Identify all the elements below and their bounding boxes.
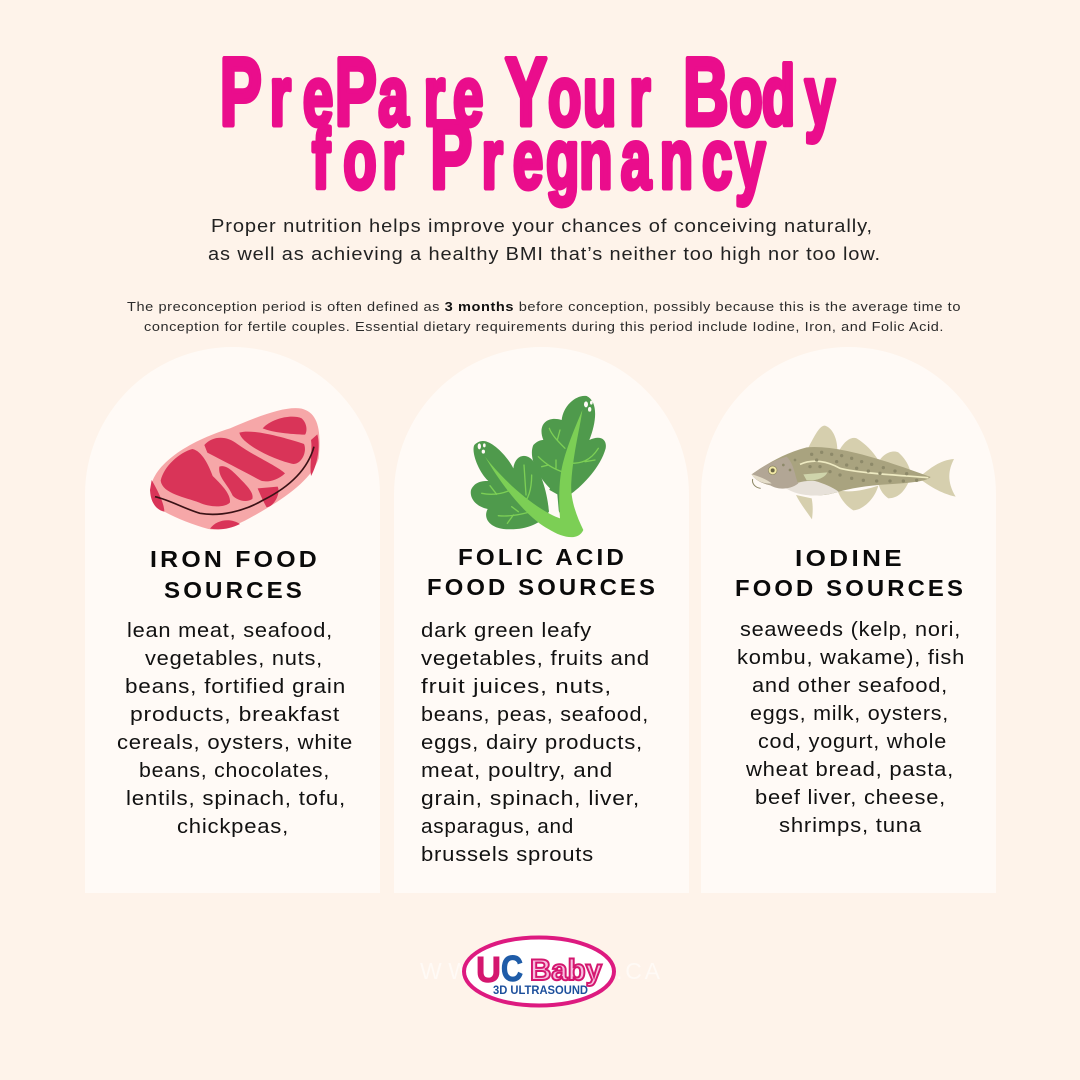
iron food list: vegetables, nuts, <box>145 648 323 670</box>
panel: iodine food sources <box>701 347 996 893</box>
iodine food list: shrimps, tuna <box>779 815 922 837</box>
iron food list <box>117 620 353 838</box>
iron food list: beans, chocolates, <box>139 760 330 782</box>
folic acid heading <box>427 544 658 600</box>
iodine card background <box>701 347 996 893</box>
panel: iron food sources <box>85 347 380 893</box>
iodine food list: kombu, wakame), fish <box>737 647 965 669</box>
folic acid food list: asparagus, and <box>421 816 574 838</box>
intro text: as well as achieving a healthy BMI that’s neither too high nor too low. <box>208 244 881 264</box>
iodine heading <box>735 545 966 601</box>
intro text <box>208 216 881 264</box>
iron heading: SOURCES <box>164 577 305 603</box>
folic acid food list: dark green leafy <box>421 620 592 642</box>
logo ellipse <box>464 938 614 1006</box>
icon: leafy greens <box>471 396 606 537</box>
title: PrePare Your Body <box>220 38 836 146</box>
iodine food list: seaweeds (kelp, nori, <box>740 619 961 641</box>
iodine food list: eggs, milk, oysters, <box>750 703 949 725</box>
logo wordmark: U <box>476 949 501 990</box>
logo wordmark: 3D ULTRASOUND <box>493 985 588 997</box>
folic acid food list: grain, spinach, liver, <box>421 788 640 810</box>
iodine food list: wheat bread, pasta, <box>745 759 954 781</box>
folic acid food list: beans, peas, seafood, <box>421 704 649 726</box>
folic acid heading: FOLIC ACID <box>458 544 627 570</box>
logo wordmark: Baby <box>530 954 602 987</box>
iron food list: beans, fortified grain <box>125 676 346 698</box>
iron heading <box>150 546 320 603</box>
icon: cod fish <box>752 426 956 519</box>
iodine heading: FOOD SOURCES <box>735 575 966 601</box>
folic acid food list <box>421 620 650 866</box>
title: for Pregnancy <box>312 101 766 209</box>
iodine food list: cod, yogurt, whole <box>758 731 947 753</box>
iodine food list: beef liver, cheese, <box>755 787 946 809</box>
folic acid food list: eggs, dairy products, <box>421 732 643 754</box>
faint website address: .CA <box>616 958 661 984</box>
iron food list: chickpeas, <box>177 816 289 838</box>
icon: steak <box>150 408 320 530</box>
faint website address: WW <box>420 958 470 984</box>
iodine heading: IODINE <box>795 545 905 571</box>
logo wordmark <box>476 948 602 997</box>
logo wordmark: C <box>501 948 523 989</box>
folic acid food list: fruit juices, nuts, <box>421 676 612 698</box>
intro text: Proper nutrition helps improve your chances of conceiving naturally, <box>211 216 873 236</box>
folic acid food list: vegetables, fruits and <box>421 648 650 670</box>
folic acid card background <box>394 347 689 893</box>
iron card background <box>85 347 380 893</box>
iodine food list: and other seafood, <box>752 675 948 697</box>
iron food list: lean meat, seafood, <box>127 620 333 642</box>
folic acid food list: meat, poultry, and <box>421 760 613 782</box>
iron heading: IRON FOOD <box>150 546 320 572</box>
preconception note <box>127 300 961 334</box>
iron food list: lentils, spinach, tofu, <box>126 788 346 810</box>
preconception note: The preconception period is often defined as 3 months before conception, possibly because this is the average time to <box>127 300 961 314</box>
folic acid food list: brussels sprouts <box>421 844 594 866</box>
faint website address <box>420 958 661 984</box>
panel: folic acid food sources <box>394 347 689 893</box>
iodine food list <box>737 619 965 837</box>
folic acid heading: FOOD SOURCES <box>427 574 658 600</box>
title <box>220 38 836 209</box>
preconception note: conception for fertile couples. Essential dietary requirements during this period include Iodine, Iron, and Folic Acid. <box>144 320 944 334</box>
iron food list: cereals, oysters, white <box>117 732 353 754</box>
logo <box>464 938 614 1006</box>
iron food list: products, breakfast <box>130 704 340 726</box>
